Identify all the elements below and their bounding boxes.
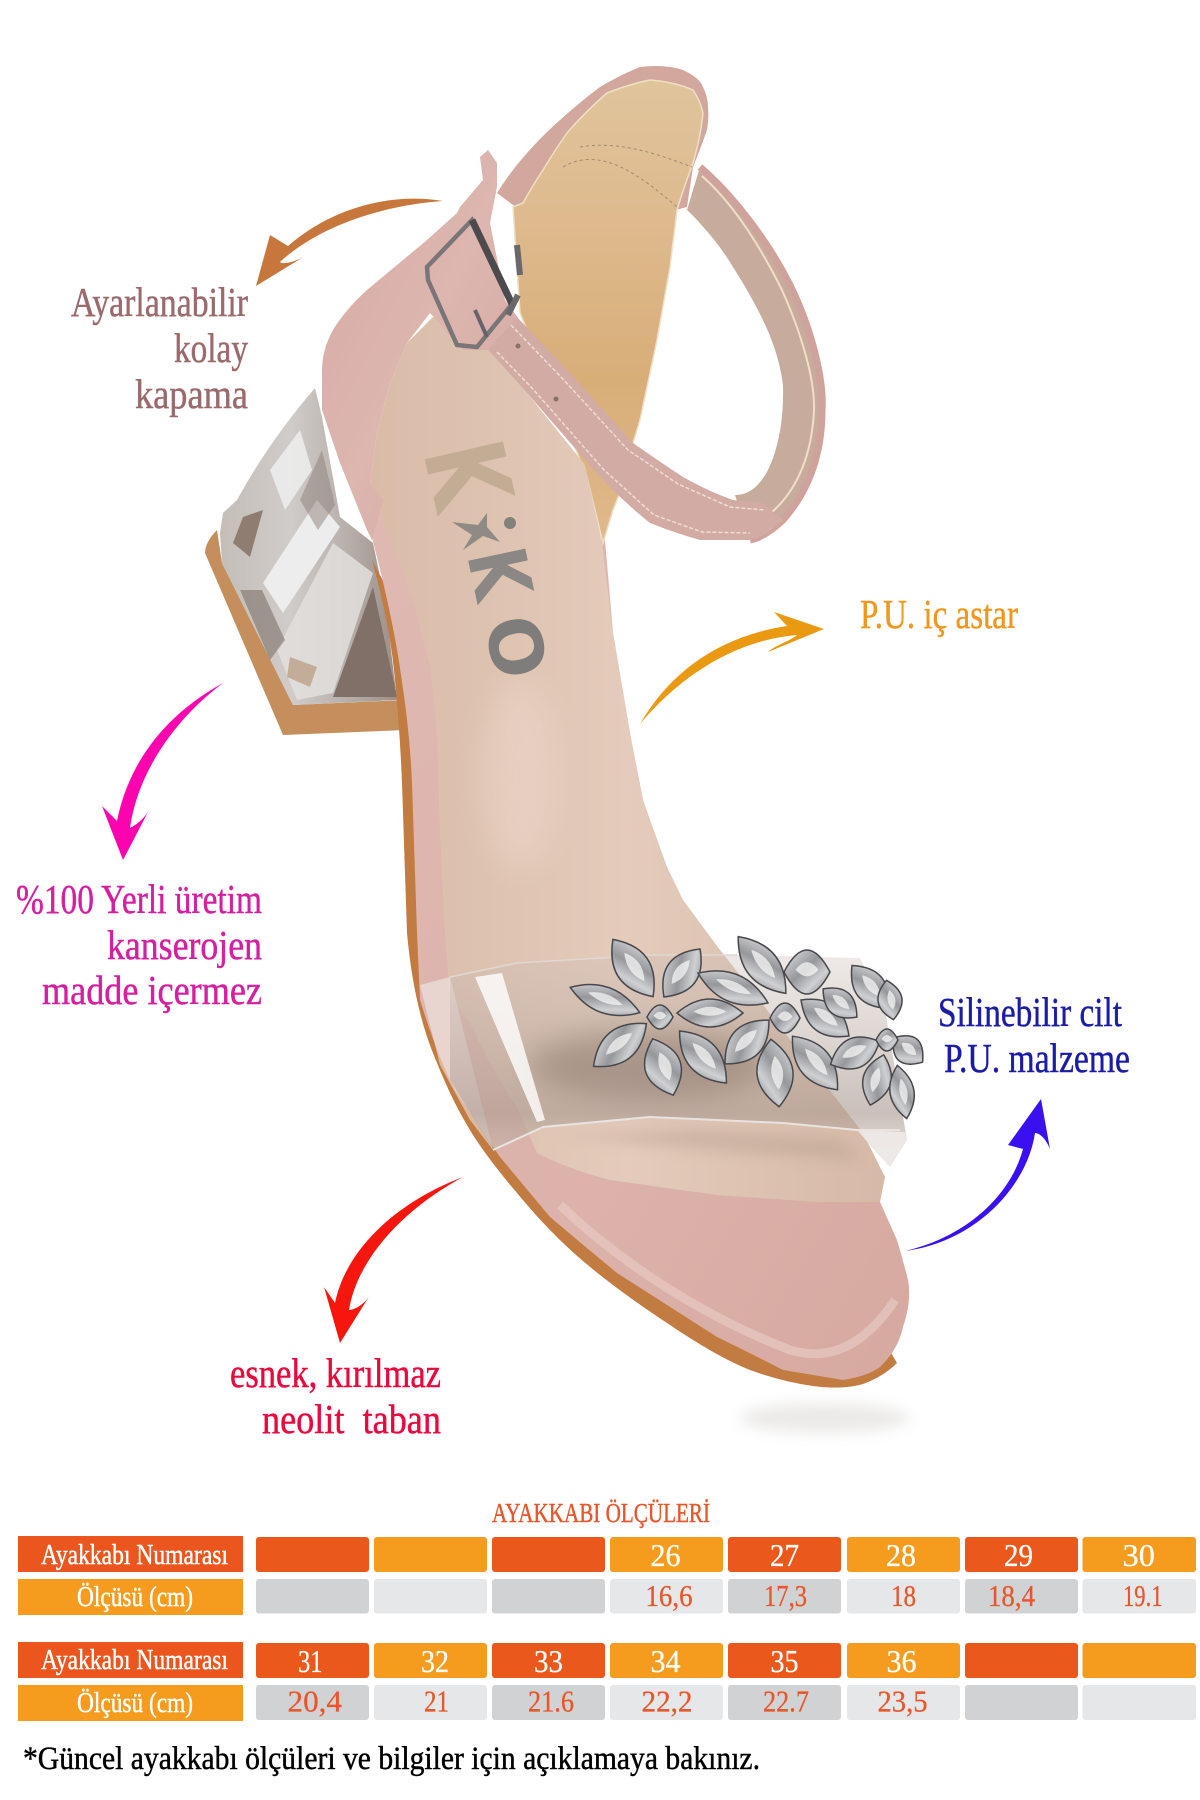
tan inner lining — [513, 80, 703, 543]
size cells: 36 — [886, 1643, 916, 1679]
gem flower cluster — [566, 926, 932, 1121]
label: lining: P.U. iç astar — [860, 591, 1018, 637]
lining stitching — [563, 145, 692, 207]
measurement cells: 23,5 — [878, 1684, 928, 1718]
measurement cells: 19.1 — [1123, 1578, 1162, 1613]
row label: measurement: Ölçüsü (cm) — [77, 1688, 193, 1719]
size chart: first table — [18, 1536, 1196, 1615]
label: local production: %100 Yerli üretim — [16, 876, 262, 922]
label: wipeable material: P.U. malzeme — [944, 1035, 1130, 1081]
size cells: 31 — [298, 1643, 322, 1679]
heel counter — [322, 150, 518, 540]
label: wipeable material — [938, 989, 1130, 1081]
label: local production: kanserojen — [107, 922, 262, 968]
label: adjustable closure: Ayarlanabilir — [71, 279, 248, 325]
size cells — [256, 1537, 1196, 1573]
size cells: 26 — [650, 1537, 680, 1573]
size cells: 35 — [770, 1643, 798, 1679]
measurement cells: 21.6 — [528, 1684, 574, 1718]
collar rim — [497, 66, 708, 240]
insole sheen — [484, 680, 556, 870]
measurement cells: 18 — [891, 1578, 916, 1613]
label: local production — [16, 876, 262, 1013]
insole logo: O — [466, 608, 562, 686]
illustration: sandal with clear heel and gem strap — [205, 66, 932, 1433]
measurement cells: 18,4 — [988, 1578, 1035, 1613]
label: local production: madde içermez — [42, 967, 262, 1013]
row label: measurement: Ölçüsü (cm) — [77, 1582, 193, 1613]
measurement cells: 20,4 — [288, 1684, 343, 1718]
measurement cells: 17,3 — [764, 1578, 807, 1613]
arrow: flexible sole — [324, 1177, 463, 1343]
arrow: wipeable material — [905, 1099, 1050, 1251]
arrow: adjustable closure — [256, 199, 443, 286]
footnote: *Güncel ayakkabı ölçüleri ve bilgiler için açıklamaya bakınız. — [23, 1741, 760, 1777]
toe highlight — [560, 1205, 895, 1354]
size cells: 27 — [770, 1537, 799, 1573]
tan outsole — [372, 560, 897, 1388]
ankle strap back loop — [687, 167, 822, 540]
size cells: 34 — [650, 1643, 680, 1679]
ground shadow — [740, 1403, 910, 1433]
size cells — [256, 1643, 1196, 1679]
arrow: lining — [640, 612, 824, 724]
measurement cells — [256, 1578, 1196, 1614]
clear vamp strap — [420, 955, 907, 1167]
size chart: second table — [18, 1642, 1196, 1721]
size chart heading: AYAKKABI ÖLÇÜLERİ — [492, 1498, 710, 1528]
buckle — [427, 220, 520, 347]
pink upper body and toe — [370, 480, 909, 1380]
size cells: 33 — [534, 1643, 563, 1679]
insole logo: K — [448, 540, 549, 610]
arrow: local production — [102, 683, 223, 860]
label: adjustable closure — [71, 279, 248, 417]
insole logo — [398, 429, 562, 686]
measurement cells — [256, 1684, 1196, 1720]
row label: measurement — [18, 1579, 243, 1615]
label: flexible sole: esnek, kırılmaz — [230, 1350, 441, 1396]
size cells: 30 — [1122, 1537, 1155, 1573]
measurement cells: 22.7 — [763, 1684, 809, 1718]
size cells: 28 — [886, 1537, 916, 1573]
size cells: 32 — [421, 1643, 449, 1679]
insole logo: K — [398, 429, 537, 523]
measurement cells: 22,2 — [642, 1684, 692, 1718]
label: adjustable closure: kapama — [135, 371, 248, 417]
label: flexible sole — [230, 1350, 441, 1442]
row label: shoe size: Ayakkabı Numarası — [41, 1645, 228, 1676]
label: flexible sole: neolit taban — [262, 1396, 441, 1442]
row label: measurement — [18, 1685, 243, 1721]
label: adjustable closure: kolay — [174, 325, 248, 371]
clear block heel — [205, 388, 405, 735]
measurement cells: 21 — [424, 1684, 449, 1718]
label: wipeable material: Silinebilir cilt — [938, 989, 1122, 1035]
ankle strap front band — [488, 317, 783, 540]
insole — [370, 317, 885, 1202]
toe shadow beneath clear strap — [560, 1128, 860, 1160]
size cells: 29 — [1004, 1537, 1033, 1573]
measurement cells: 16,6 — [646, 1578, 692, 1613]
row label: shoe size: Ayakkabı Numarası — [41, 1540, 228, 1571]
